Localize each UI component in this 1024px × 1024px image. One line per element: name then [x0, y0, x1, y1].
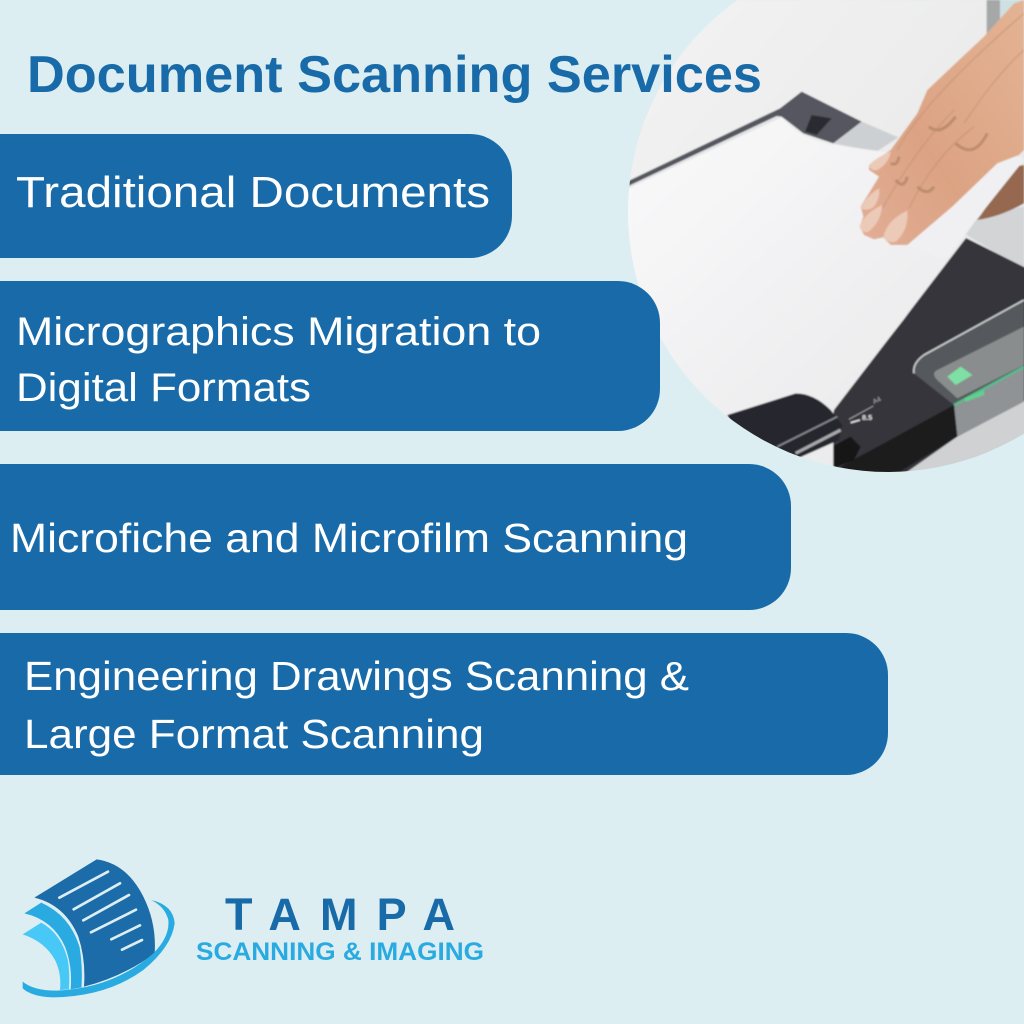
- wordmark: TAMPA: TAMPA: [225, 889, 455, 940]
- service panel: microfiche and microfilm: Microfiche and Microfilm Scanning: [10, 515, 688, 561]
- service panel: engineering drawings: [0, 633, 888, 775]
- service panel: engineering drawings: Large Format Scanning: [24, 711, 484, 757]
- title: Document Scanning Services: [27, 46, 762, 104]
- logo: Tampa Scanning & Imaging: [23, 859, 484, 997]
- service panel: traditional documents: [0, 134, 512, 258]
- service panel: micrographics migration: Micrographics Migration to: [16, 310, 541, 354]
- service panel: traditional documents: Traditional Documents: [16, 168, 490, 217]
- photo label: 8.5: 8.5: [862, 413, 872, 422]
- photo label: A4: A4: [872, 396, 882, 406]
- photo: hand feeding paper into scanner: [620, 0, 1024, 483]
- service panel: micrographics migration: Digital Formats: [16, 366, 311, 410]
- service panel: microfiche and microfilm: [0, 464, 791, 610]
- service panel: engineering drawings: Engineering Drawings Scanning &: [24, 653, 689, 699]
- icon: curled document with swoosh: [23, 859, 175, 997]
- wordmark: Scanning & Imaging: SCANNING & IMAGING: [196, 938, 484, 966]
- service panel: micrographics migration: [0, 281, 660, 431]
